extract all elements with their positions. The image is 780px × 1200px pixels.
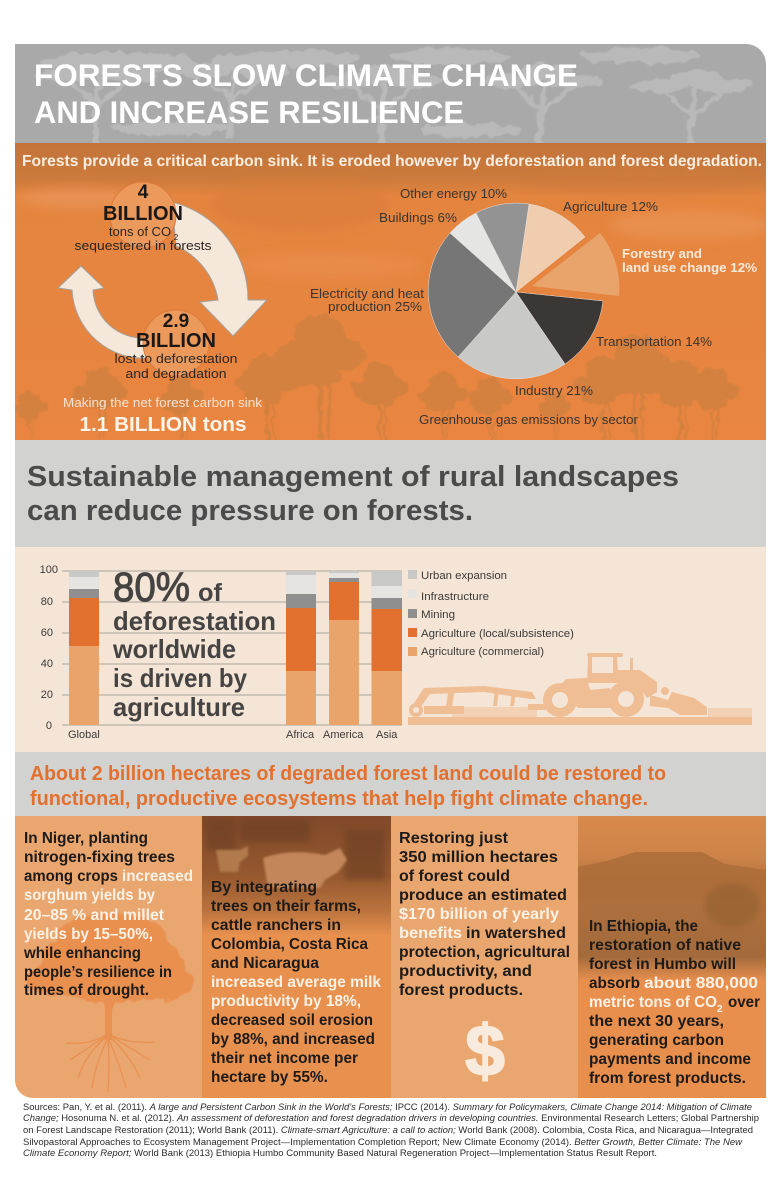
text: cattle ranchers: their net income per	[211, 1050, 358, 1067]
stat: 2.9 billion lost	[114, 311, 238, 381]
text: restoring: Restoring just	[399, 830, 508, 847]
bar: africa	[286, 571, 316, 725]
bar chart: 100	[40, 564, 58, 576]
pie labels: Transportation 14%	[596, 334, 712, 349]
pie labels: land use change 12%	[622, 260, 757, 275]
text: Niger: increased	[122, 868, 193, 885]
text: restoring: produce an estimated	[399, 887, 567, 904]
stat: net sink	[63, 395, 263, 436]
stat: 2.9 billion lost: lost to deforestation	[114, 351, 238, 366]
circle: 4 billion	[110, 182, 176, 248]
stat: 4 billion tons sequestered	[74, 182, 212, 253]
text: restoring: protection, agricultural	[399, 944, 570, 961]
subheading: Forests provide a critical carbon sink. It is eroded however by deforestation and forest degradation.	[22, 153, 762, 170]
callout: 80% of deforestation: of	[198, 579, 223, 607]
stat: net sink: Making the net forest carbon sink	[63, 395, 263, 410]
callout: 80% of deforestation	[112, 564, 276, 722]
callout: 80% of deforestation: 80%	[113, 564, 190, 610]
tractor body	[543, 653, 707, 717]
pie chart: greenhouse gas emissions by sector	[428, 203, 619, 379]
text: Niger: 20–85 % and millet	[24, 907, 164, 924]
text: Ethiopia: over	[728, 994, 760, 1011]
callout: 80% of deforestation: is driven by	[113, 663, 247, 693]
arrow: small return	[58, 266, 150, 358]
legend: Agriculture (commercial)	[421, 646, 544, 658]
bar chart: 20	[41, 689, 53, 701]
text: cattle ranchers: Colombia, Costa Rica	[211, 936, 368, 953]
text: cattle ranchers: and Nicaragua	[211, 955, 319, 972]
text: Niger: while enhancing	[23, 945, 141, 962]
bar: global	[69, 571, 99, 725]
icon: tree with roots	[26, 914, 195, 1092]
stat: 2.9 billion lost: BILLION	[136, 330, 216, 352]
panel: Ethiopia	[578, 816, 766, 1098]
bar chart: America	[323, 729, 364, 741]
bar: america	[329, 571, 359, 725]
bar chart: 40	[41, 658, 53, 670]
pie labels: Electricity and heat	[310, 286, 424, 301]
legend	[408, 570, 574, 658]
text: restoring: benefits	[399, 925, 462, 942]
bar chart	[40, 564, 402, 741]
text: cattle ranchers: cattle ranchers in	[211, 917, 341, 934]
legend: Agriculture (local/subsistence)	[421, 628, 574, 640]
stat: 4 billion tons sequestered: BILLION	[103, 203, 183, 225]
text: Ethiopia: generating carbon	[589, 1032, 724, 1049]
pie labels: Industry 21%	[515, 383, 593, 398]
plough implement	[409, 686, 552, 717]
sources: Change; Hosonuma N. et al. (2012). An assessment of deforestation and forest degradation drivers in developing countries. Environmental Research Letters; Global Partnership	[23, 1113, 759, 1124]
panel: Niger	[15, 816, 202, 1098]
bar: asia	[372, 571, 402, 725]
heading band: sustainable management	[15, 440, 766, 547]
panel: carbon sink	[12, 143, 770, 440]
stat: 2.9 billion lost: and degradation	[126, 366, 226, 381]
bar chart: Asia	[376, 729, 398, 741]
text: Ethiopia: absorb	[589, 975, 640, 992]
bar chart: Africa	[286, 729, 315, 741]
text: Niger: times of drought.	[24, 982, 149, 999]
text: Ethiopia: In Ethiopia, the	[589, 918, 698, 935]
panel: deforestation drivers	[15, 547, 766, 752]
pie labels: Forestry and	[622, 246, 702, 261]
heading band: restoration: About 2 billion hectares of degraded forest land could be restored to	[30, 763, 666, 785]
pie labels: Agriculture 12%	[563, 199, 658, 214]
text: restoring: in watershed	[466, 925, 566, 942]
text: Ethiopia: payments and income	[589, 1051, 751, 1068]
stat: 4 billion tons sequestered: tons of CO	[109, 224, 171, 239]
title: FORESTS SLOW CLIMATE CHANGE	[34, 57, 578, 93]
text: Ethiopia: forest in Humbo will	[589, 956, 736, 973]
text: Niger: yields by 15–50%,	[24, 926, 153, 943]
text: Niger: In Niger, planting	[24, 830, 148, 847]
text: cattle ranchers: productivity by 18%,	[211, 993, 361, 1010]
callout: 80% of deforestation: agriculture	[113, 692, 245, 722]
text: Ethiopia: from forest products.	[589, 1070, 746, 1087]
text: cattle ranchers	[211, 879, 381, 1086]
text: cattle ranchers: trees on their farms,	[211, 898, 361, 915]
text: cattle ranchers: decreased soil erosion	[211, 1012, 373, 1029]
text: Niger: among crops	[24, 868, 118, 885]
text: restoring: $170 billion of yearly	[399, 906, 559, 923]
bar chart: 80	[41, 596, 53, 608]
legend: Infrastructure	[421, 591, 489, 603]
pie labels	[310, 186, 757, 427]
pie labels: Buildings 6%	[379, 210, 457, 225]
title	[34, 57, 578, 130]
background: clouds and tree silhouettes	[12, 170, 770, 440]
stat: 4 billion tons sequestered: 4	[138, 182, 149, 203]
text: Niger: people’s resilience in	[24, 964, 172, 981]
panel: Colombia, Costa Rica and Nicaragua	[202, 816, 391, 1098]
text: Ethiopia	[589, 918, 760, 1087]
pie labels: Other energy 10%	[400, 186, 507, 201]
text: cattle ranchers: increased average milk	[211, 974, 381, 991]
stat: 2.9 billion lost: 2.9	[163, 311, 189, 332]
text: Niger	[23, 830, 193, 999]
icon: tractor with plough	[408, 653, 752, 725]
panel: title header	[15, 44, 766, 143]
heading band: restoration	[15, 752, 766, 816]
text: restoring: 350 million hectares	[399, 849, 558, 866]
stat: net sink: 1.1 BILLION tons	[80, 414, 247, 436]
text: cattle ranchers: hectare by 55%.	[211, 1069, 328, 1086]
photo: mountain landscape	[578, 816, 766, 981]
text: Ethiopia: about 880,000	[644, 975, 758, 992]
circle: 2.9 billion	[143, 310, 209, 376]
icon: dollar sign: $	[465, 1012, 505, 1091]
text: Ethiopia: the next 30 years,	[589, 1013, 724, 1030]
text: Ethiopia: restoration of native	[589, 937, 741, 954]
stat: 4 billion tons sequestered: 2	[174, 233, 179, 242]
bar chart: 0	[46, 720, 52, 732]
bar chart: Global	[68, 729, 100, 741]
stat: 4 billion tons sequestered: sequestered in forests	[74, 238, 212, 253]
sources: on Forest Landscape Restoration (2011); World Bank (2011). Climate-smart Agriculture: a call to action; World Bank (2008). Colombia, Costa Rica, and Nicaragua—Integrated	[23, 1125, 753, 1136]
legend: Mining	[421, 609, 455, 621]
text: restoring: of forest could	[399, 868, 510, 885]
sources	[23, 1102, 759, 1159]
sources: Sources: Pan, Y. et al. (2011). A large and Persistent Carbon Sink in the World’s Forests; IPCC (2014). Summary for Policymakers, Climate Change 2014: Mitigation of Climate	[23, 1102, 752, 1113]
heading band: sustainable management: Sustainable management of rural landscapes	[27, 461, 679, 493]
callout: 80% of deforestation: deforestation	[113, 606, 276, 636]
photo: cattle under trees	[202, 816, 391, 936]
callout: 80% of deforestation: worldwide	[112, 634, 236, 664]
text: restoring	[399, 830, 570, 999]
sources: Climate Economy Report; World Bank (2013) Ethiopia Humbo Community Based Natural Regeneration Project—Implementation Status Result Report.	[23, 1148, 657, 1159]
text: restoring: forest products.	[399, 982, 523, 999]
sources: Silvopastoral Approaches to Ecosystem Management Project—Implementation Completion Report; New Climate Economy (2014). Better Growth, Better Climate: The New	[23, 1137, 743, 1148]
heading band: sustainable management: can reduce pressure on forests.	[27, 495, 473, 527]
text: Niger: nitrogen-fixing trees	[24, 849, 175, 866]
text: Ethiopia: 2	[717, 1004, 723, 1015]
background: pale acacia trees	[35, 48, 752, 155]
pie labels: Greenhouse gas emissions by sector	[419, 412, 639, 427]
text: cattle ranchers: by 88%, and increased	[211, 1031, 375, 1048]
title: AND INCREASE RESILIENCE	[34, 94, 464, 130]
arrow: large clockwise	[172, 202, 267, 336]
text: restoring: productivity, and	[399, 963, 532, 980]
text: cattle ranchers: By integrating	[211, 879, 317, 896]
heading band: restoration: functional, productive ecosystems that help fight climate change.	[30, 788, 648, 810]
pie labels: production 25%	[328, 299, 422, 314]
panel: restoring hectares	[391, 816, 578, 1098]
text: Ethiopia: metric tons of CO	[589, 994, 717, 1011]
bar chart: 60	[41, 627, 53, 639]
text: Niger: sorghum yields by	[24, 887, 155, 904]
legend: Urban expansion	[421, 570, 507, 582]
